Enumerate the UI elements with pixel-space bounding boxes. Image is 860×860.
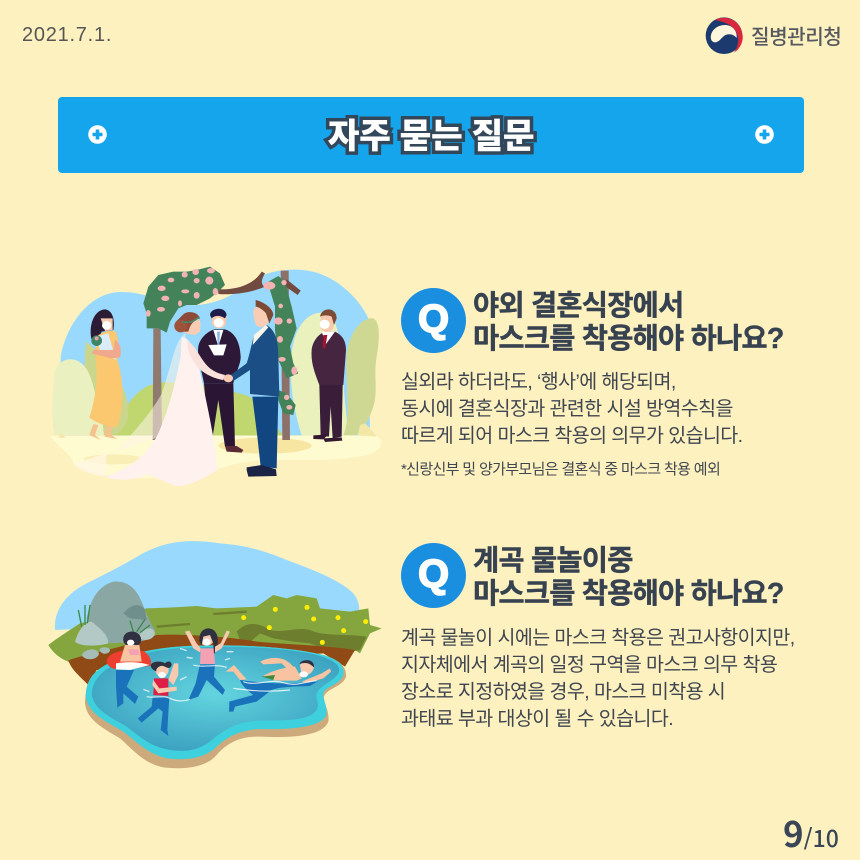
answer 2: 과태료 부과 대상이 될 수 있습니다. bbox=[401, 708, 673, 730]
rocks bbox=[75, 581, 155, 659]
icon: plus left bbox=[88, 125, 107, 144]
Q badge 2 bbox=[401, 543, 466, 608]
answer 1 bbox=[401, 371, 743, 447]
groom bbox=[224, 300, 279, 477]
question 1 bbox=[473, 290, 783, 355]
question 1: 마스크를 착용해야 하나요? bbox=[473, 323, 783, 355]
footnote: *신랑신부 및 양가부모님은 결혼식 중 마스크 착용 예외 bbox=[401, 461, 720, 478]
heading: 자주 묻는 질문 bbox=[328, 118, 534, 156]
agency logo bbox=[706, 17, 841, 54]
girl center bbox=[138, 662, 178, 736]
answer 1: 동시에 결혼식장과 관련한 시설 방역수칙을 bbox=[401, 398, 733, 420]
question 2: 계곡 물놀이중 bbox=[473, 544, 633, 576]
Q badge 1: Q bbox=[418, 296, 449, 340]
page number: 9/10 bbox=[783, 807, 839, 858]
answer 2: 계곡 물놀이 시에는 마스크 착용은 권고사항이지만, bbox=[401, 627, 795, 649]
yellow flowers bbox=[241, 605, 368, 645]
title banner bbox=[58, 97, 804, 173]
answer 1: 따르게 되어 마스크 착용의 의무가 있습니다. bbox=[401, 425, 743, 447]
Q badge 2: Q bbox=[418, 552, 449, 596]
agency logo: 질병관리청 bbox=[751, 27, 841, 49]
answer 1: 실외라 하더라도, ‘행사’에 해당되며, bbox=[401, 371, 676, 393]
woman in tube bbox=[107, 631, 151, 708]
bride bbox=[73, 312, 225, 486]
pool bbox=[85, 645, 346, 768]
question 2: 마스크를 착용해야 하나요? bbox=[473, 578, 783, 610]
answer 2: 장소로 지정하였을 경우, 마스크 미착용 시 bbox=[401, 681, 725, 703]
man swimming bbox=[226, 658, 331, 712]
bridesmaid bbox=[89, 309, 122, 440]
question 1: 야외 결혼식장에서 bbox=[473, 290, 683, 322]
guest bbox=[312, 309, 346, 442]
icon: plus right bbox=[755, 125, 774, 144]
Q badge 1 bbox=[401, 288, 466, 352]
officiant bbox=[198, 309, 243, 453]
girl right bbox=[185, 628, 230, 700]
question 2 bbox=[473, 544, 783, 610]
date: 2021.7.1. bbox=[22, 24, 112, 46]
answer 2 bbox=[401, 627, 795, 730]
answer 2: 지자체에서 계곡의 일정 구역을 마스크 의무 착용 bbox=[401, 654, 777, 676]
